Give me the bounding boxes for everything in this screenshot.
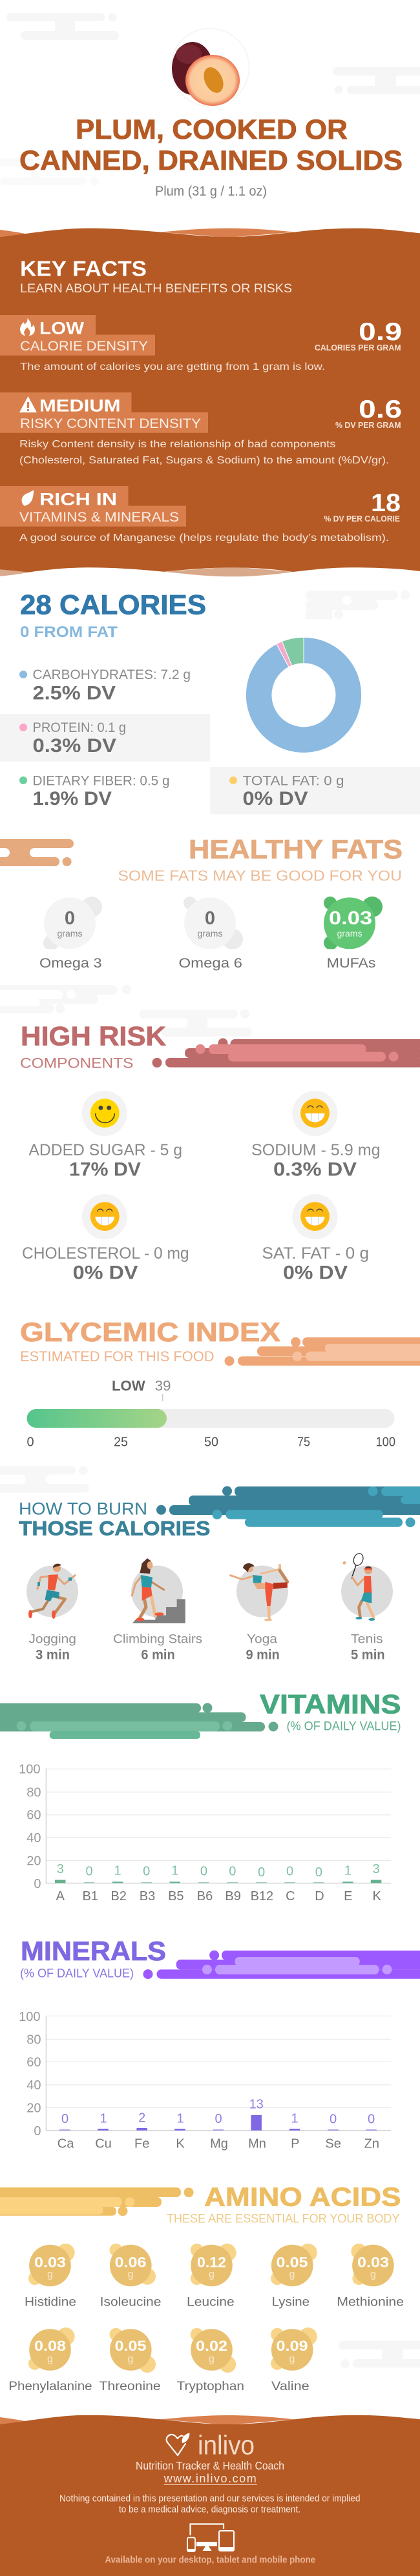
- amino acid: leucine: 0.12: [197, 2255, 226, 2271]
- icon: warning triangle: [19, 396, 37, 412]
- component: added sugar: ADDED SUGAR - 5 g: [28, 1141, 182, 1159]
- heading: healthy fats: HEALTHY FATS: [189, 834, 403, 864]
- amino acid: phenylalanine: 0.08: [34, 2338, 66, 2354]
- legend: protein: 0.3% DV: [32, 735, 116, 756]
- serving size: Plum (31 g / 1.1 oz): [155, 184, 267, 199]
- amino acid: phenylalanine: Phenylalanine: [8, 2379, 92, 2393]
- chart: vitamins bar chart: 80: [26, 1785, 41, 1800]
- fat: omega 3: 0: [65, 908, 75, 929]
- chart: vitamins bar chart: 40: [26, 1831, 41, 1845]
- chart: glycemic index gauge: 75: [297, 1435, 310, 1450]
- chart: glycemic index gauge: 39: [155, 1377, 171, 1394]
- legend: protein: PROTEIN: 0.1 g: [32, 720, 126, 735]
- heading: those calories: THOSE CALORIES: [19, 1517, 210, 1540]
- fact: rich in vitamins and minerals: [0, 486, 401, 543]
- chart: vitamins bar chart: [19, 1762, 391, 1903]
- amino acid: threonine: [99, 2328, 161, 2393]
- chart: vitamins bar chart: 0: [315, 1865, 322, 1880]
- chart: vitamins bar chart: A: [56, 1889, 65, 1903]
- chart: vitamins bar chart: 0: [286, 1865, 293, 1879]
- chart: minerals bar chart: 100: [19, 2010, 40, 2024]
- fat: omega 3: grams: [58, 928, 82, 938]
- disclaimer: [59, 2493, 361, 2515]
- activity: climbing stairs: 6 min: [141, 1647, 175, 1662]
- icon: flame: [20, 318, 35, 336]
- chart: glycemic index gauge: 0: [27, 1435, 34, 1450]
- amino acid: tryptophan: [177, 2328, 244, 2393]
- activity: yoga: [230, 1563, 288, 1662]
- chart: vitamins bar chart: 0: [85, 1865, 93, 1879]
- legend: total fat: TOTAL FAT: 0 g: [243, 773, 344, 789]
- fact: rich in vitamins and minerals: RICH IN: [39, 489, 117, 509]
- icon: runner: [28, 1564, 75, 1619]
- tagline: Nutrition Tracker & Health Coach: [136, 2459, 284, 2472]
- chart: vitamins bar chart: 20: [26, 1854, 41, 1868]
- chart: minerals bar chart: 40: [26, 2078, 41, 2093]
- fact: low calorie density: [0, 315, 402, 372]
- amino acid: leucine: [187, 2244, 236, 2309]
- icon: grinning face: [300, 1099, 330, 1128]
- logo: inlivo: [167, 2430, 255, 2460]
- chart: glycemic index gauge: 100: [376, 1435, 395, 1450]
- chart: minerals bar chart: 20: [26, 2102, 41, 2116]
- legend: dietary fiber: 1.9% DV: [32, 788, 112, 809]
- panel: key facts: [0, 228, 420, 576]
- amino acid: isoleucine: Isoleucine: [100, 2295, 162, 2309]
- chart: minerals bar chart: Fe: [134, 2137, 149, 2151]
- fat: omega 3: [39, 897, 102, 971]
- subheading: amino acids: THESE ARE ESSENTIAL FOR YOUR BODY: [167, 2212, 400, 2226]
- panel: footer: [0, 2415, 420, 2576]
- decorative band: vitamins: [0, 1703, 278, 1739]
- legend: dietary fiber: DIETARY FIBER: 0.5 g: [32, 773, 169, 789]
- fat: omega 6: grams: [198, 928, 222, 938]
- chart: minerals bar chart: 1: [100, 2111, 107, 2125]
- amino acid: valine: Valine: [271, 2379, 310, 2393]
- chart: glycemic index gauge: 25: [114, 1435, 128, 1450]
- activity: climbing stairs: [113, 1558, 202, 1662]
- subheading: calories from fat: 0 FROM FAT: [20, 624, 118, 641]
- activity: jogging: Jogging: [28, 1632, 76, 1646]
- chart: glycemic index gauge: [27, 1377, 395, 1450]
- fat: MUFAs: 0.03: [329, 908, 372, 929]
- chart: vitamins bar chart: 0: [258, 1865, 265, 1880]
- chart: minerals bar chart: 80: [26, 2033, 41, 2047]
- fact: low calorie density: CALORIE DENSITY: [20, 338, 148, 354]
- activity: tennis: Tenis: [351, 1632, 383, 1646]
- chart: minerals bar chart: 0: [368, 2112, 375, 2126]
- chart: minerals bar chart: 60: [26, 2055, 41, 2069]
- component: cholesterol: 0% DV: [73, 1262, 138, 1283]
- activity: yoga: 9 min: [246, 1647, 280, 1662]
- amino acid: methionine: [337, 2244, 404, 2309]
- subheading: components: COMPONENTS: [20, 1055, 133, 1071]
- fat: omega 6: Omega 6: [178, 956, 242, 971]
- activity: jogging: 3 min: [36, 1647, 70, 1662]
- amino acid: lysine: 0.05: [277, 2255, 308, 2271]
- chart: vitamins bar chart: 0: [200, 1865, 207, 1879]
- chart: vitamins bar chart: 3: [372, 1862, 380, 1876]
- chart: minerals bar chart: Zn: [364, 2137, 379, 2151]
- fact: medium risky content density: RISKY CONTENT DENSITY: [20, 416, 201, 431]
- component: sodium: SODIUM - 5.9 mg: [251, 1141, 381, 1159]
- subheading: healthy fats: SOME FATS MAY BE GOOD FOR YOU: [118, 867, 402, 884]
- chart: vitamins bar chart: B12: [251, 1889, 273, 1903]
- amino acid: lysine: Lysine: [272, 2295, 310, 2309]
- amino acid: lysine: g: [289, 2269, 295, 2280]
- fact: medium risky content density: (Cholesterol, Saturated Fat, Sugars & Sodium) to the amount (%DV/gr).: [19, 455, 389, 466]
- legend: carbohydrates: [19, 667, 191, 704]
- fact: low calorie density: The amount of calories you are getting from 1 gram is low.: [20, 361, 325, 372]
- amino acid: histidine: g: [47, 2269, 53, 2280]
- icon: leaf: [22, 490, 34, 506]
- title: CANNED, DRAINED SOLIDS: [19, 145, 403, 176]
- legend: total fat: [210, 767, 420, 815]
- fat: MUFAs: grams: [337, 928, 362, 938]
- fact: low calorie density: 0.9: [359, 318, 402, 346]
- amino acid: threonine: Threonine: [99, 2379, 161, 2393]
- chart: vitamins bar chart: 60: [26, 1809, 41, 1823]
- heading: calories: 28 CALORIES: [20, 590, 206, 621]
- decorative band: high risk: [152, 1038, 420, 1068]
- amino acid: isoleucine: 0.06: [115, 2255, 146, 2271]
- component: saturated fat: 0% DV: [283, 1262, 348, 1283]
- decorative band: burn calories: [156, 1486, 420, 1527]
- amino acid: methionine: Methionine: [337, 2295, 404, 2309]
- chart: vitamins bar chart: 1: [171, 1864, 178, 1878]
- chart: minerals bar chart: 1: [291, 2111, 299, 2125]
- fact: low calorie density: CALORIES PER GRAM: [315, 343, 401, 352]
- icon: grinning face: [90, 1202, 120, 1231]
- food image: plum: [171, 28, 249, 106]
- fat: MUFAs: [324, 897, 383, 971]
- chart: minerals bar chart: 0: [61, 2112, 68, 2126]
- amino acid: histidine: [25, 2244, 76, 2309]
- amino acid: threonine: g: [128, 2353, 133, 2364]
- fat: omega 3: Omega 3: [39, 956, 102, 971]
- amino acid: threonine: 0.05: [115, 2338, 146, 2354]
- chart: minerals bar chart: P: [291, 2137, 299, 2151]
- fact: medium risky content density: Risky Content density is the relationship of bad components: [19, 439, 336, 450]
- fact: rich in vitamins and minerals: 18: [371, 489, 401, 517]
- chart: vitamins bar chart: C: [286, 1889, 295, 1903]
- legend: carbohydrates: CARBOHYDRATES: 7.2 g: [32, 667, 191, 682]
- amino acid: valine: 0.09: [277, 2338, 308, 2354]
- legend: protein: [0, 714, 210, 762]
- disclaimer: Nothing contained in this presentation and our services is intended or implied: [59, 2493, 361, 2504]
- chart: vitamins bar chart: 1: [114, 1864, 121, 1878]
- heading: amino acids: AMINO ACIDS: [204, 2182, 401, 2212]
- amino acid: histidine: 0.03: [34, 2255, 66, 2271]
- activity: jogging: [26, 1564, 78, 1662]
- subheading: key facts: LEARN ABOUT HEALTH BENEFITS OR RISKS: [20, 282, 292, 296]
- activity: tennis: [341, 1552, 393, 1662]
- component: sodium: [251, 1091, 381, 1180]
- chart: vitamins bar chart: B6: [197, 1889, 213, 1903]
- decorative band: amino acids: [0, 2187, 194, 2216]
- title: [19, 114, 403, 176]
- amino acid: leucine: Leucine: [187, 2295, 235, 2309]
- activity: tennis: 5 min: [351, 1647, 385, 1662]
- icon: grinning face: [300, 1202, 330, 1231]
- decorative band: glycemic index: [225, 1337, 420, 1366]
- chart: minerals bar chart: 13: [249, 2098, 264, 2112]
- chart: vitamins bar chart: D: [315, 1889, 324, 1903]
- chart: vitamins bar chart: B1: [82, 1889, 98, 1903]
- subheading: glycemic index: ESTIMATED FOR THIS FOOD: [20, 1348, 215, 1364]
- logo: inlivo: inlivo: [198, 2430, 255, 2460]
- activity: climbing stairs: Climbing Stairs: [113, 1632, 202, 1646]
- heading: vitamins: VITAMINS: [260, 1689, 401, 1719]
- component: added sugar: [28, 1091, 182, 1180]
- fact: low calorie density: LOW: [39, 319, 85, 338]
- chart: vitamins bar chart: B5: [168, 1889, 184, 1903]
- amino acid: tryptophan: Tryptophan: [177, 2379, 244, 2393]
- fact: rich in vitamins and minerals: % DV PER CALORIE: [324, 514, 400, 523]
- amino acid: lysine: [271, 2244, 317, 2309]
- icon: stair climber: [132, 1558, 185, 1623]
- chart: vitamins bar chart: E: [344, 1889, 352, 1903]
- component: saturated fat: SAT. FAT - 0 g: [262, 1244, 369, 1263]
- icon: desktop, tablet and phone: [187, 2524, 234, 2551]
- fat: omega 6: 0: [205, 908, 215, 929]
- website link: www.inlivo.com: [163, 2472, 257, 2485]
- amino acid: valine: g: [289, 2353, 295, 2364]
- chart: minerals bar chart: Mg: [210, 2137, 228, 2151]
- legend: dietary fiber: [19, 773, 169, 809]
- amino acid: valine: [271, 2328, 317, 2393]
- legend: carbohydrates: 2.5% DV: [32, 683, 116, 704]
- chart: vitamins bar chart: 3: [57, 1862, 64, 1876]
- amino acid: isoleucine: [100, 2244, 162, 2309]
- heading: how to burn: HOW TO BURN: [19, 1499, 147, 1518]
- component: sodium: 0.3% DV: [273, 1159, 357, 1180]
- amino acid: leucine: g: [209, 2269, 215, 2280]
- disclaimer: to be a medical advice, diagnosis or treatment.: [119, 2504, 300, 2515]
- chart: calorie donut: [246, 637, 362, 753]
- icon: yoga pose: [230, 1563, 288, 1621]
- chart: vitamins bar chart: B9: [225, 1889, 241, 1903]
- chart: glycemic index gauge: LOW: [112, 1377, 145, 1394]
- amino acid: phenylalanine: g: [47, 2353, 53, 2364]
- chart: glycemic index gauge: 50: [204, 1435, 218, 1450]
- heading: minerals: MINERALS: [21, 1936, 166, 1966]
- amino acid: isoleucine: g: [128, 2269, 133, 2280]
- heading: high risk: HIGH RISK: [21, 1021, 166, 1051]
- chart: minerals bar chart: 0: [215, 2112, 222, 2126]
- legend: total fat: 0% DV: [243, 788, 308, 809]
- fact: medium risky content density: % DV PER GRAM: [335, 421, 401, 430]
- title: PLUM, COOKED OR: [76, 114, 348, 145]
- chart: minerals bar chart: [19, 2010, 391, 2151]
- subheading: minerals: (% OF DAILY VALUE): [20, 1967, 134, 1981]
- fat: omega 6: [178, 897, 243, 971]
- subheading: vitamins: (% OF DAILY VALUE): [287, 1719, 401, 1734]
- chart: vitamins bar chart: 0: [34, 1877, 41, 1891]
- component: cholesterol: [22, 1194, 189, 1283]
- amino acid: phenylalanine: [8, 2328, 92, 2393]
- chart: vitamins bar chart: 100: [19, 1762, 40, 1776]
- fat: MUFAs: MUFAs: [327, 956, 376, 971]
- component: cholesterol: CHOLESTEROL - 0 mg: [22, 1244, 189, 1263]
- chart: minerals bar chart: 0: [34, 2124, 41, 2138]
- heading: key facts: KEY FACTS: [20, 257, 147, 280]
- chart: vitamins bar chart: B3: [140, 1889, 155, 1903]
- chart: vitamins bar chart: B2: [110, 1889, 127, 1903]
- chart: minerals bar chart: Cu: [95, 2137, 112, 2151]
- chart: vitamins bar chart: K: [373, 1889, 382, 1903]
- component: saturated fat: [262, 1194, 369, 1283]
- icon: tennis player: [342, 1552, 375, 1621]
- amino acid: methionine: 0.03: [357, 2255, 389, 2271]
- fact: rich in vitamins and minerals: A good source of Manganese (helps regulate the body’s metabolism).: [19, 532, 389, 543]
- chart: minerals bar chart: 2: [138, 2111, 145, 2125]
- heading: glycemic index: GLYCEMIC INDEX: [20, 1317, 280, 1347]
- icon: smiling face: [90, 1099, 120, 1128]
- chart: minerals bar chart: 1: [176, 2111, 184, 2125]
- decorative band: minerals: [143, 1951, 420, 1979]
- chart: minerals bar chart: Mn: [248, 2137, 266, 2151]
- chart: minerals bar chart: Ca: [58, 2137, 74, 2151]
- chart: vitamins bar chart: 0: [229, 1865, 236, 1879]
- fact: medium risky content density: [0, 392, 402, 466]
- component: added sugar: 17% DV: [69, 1159, 141, 1180]
- chart: minerals bar chart: K: [176, 2137, 185, 2151]
- fact: medium risky content density: 0.6: [359, 396, 402, 423]
- fact: medium risky content density: MEDIUM: [39, 396, 120, 416]
- amino acid: tryptophan: 0.02: [196, 2338, 227, 2354]
- activity: yoga: Yoga: [247, 1632, 277, 1646]
- amino acid: histidine: Histidine: [25, 2295, 76, 2309]
- fact: rich in vitamins and minerals: VITAMINS & MINERALS: [19, 509, 179, 525]
- chart: vitamins bar chart: 0: [143, 1865, 150, 1879]
- availability note: Available on your desktop, tablet and mobile phone: [105, 2555, 315, 2566]
- chart: minerals bar chart: Se: [325, 2137, 341, 2151]
- amino acid: tryptophan: g: [209, 2353, 215, 2364]
- amino acid: methionine: g: [370, 2269, 376, 2280]
- chart: minerals bar chart: 0: [330, 2112, 337, 2126]
- chart: vitamins bar chart: 1: [344, 1864, 352, 1878]
